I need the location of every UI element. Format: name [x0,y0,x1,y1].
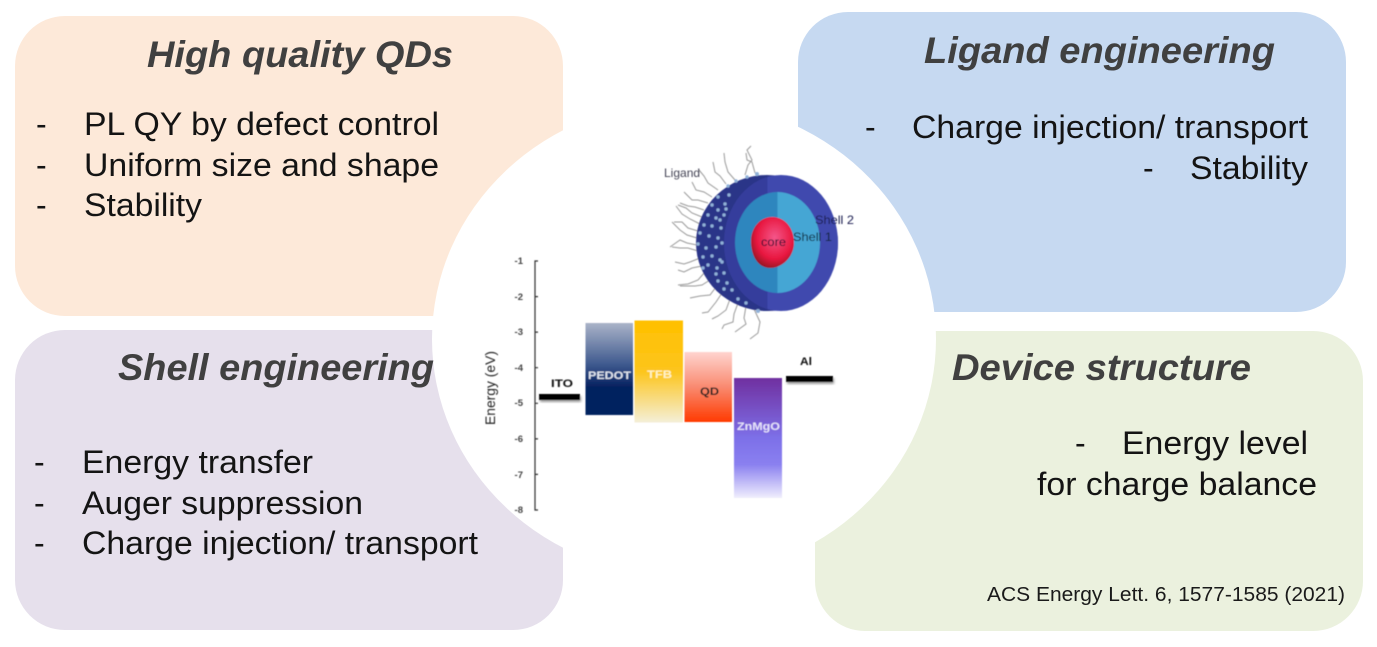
ZnMgO bar [734,378,782,498]
text block: High quality QDs list: - [36,106,47,142]
y axis tick labels: -1 [515,256,524,267]
quantum dot labels: Ligand [664,166,700,180]
y axis tick labels: -2 [515,292,523,303]
text block: Ligand engineering list: - [1143,150,1154,186]
text block: Device structure list: for charge balance [1037,466,1317,502]
panel: Device structure background [815,331,1363,631]
Al level: Al [800,356,812,368]
y axis title: Energy (eV) [482,351,498,425]
text block: Shell engineering list: - [34,525,45,561]
citation: ACS Energy Lett. 6, 1577-1585 (2021) [987,584,1345,606]
text block: Device structure list: - [1075,425,1086,461]
heading: Ligand engineering: Ligand engineering [924,30,1275,71]
central white circle [432,101,936,577]
panel: Shell engineering background [15,330,563,630]
y axis tick labels [515,256,524,516]
quantum dot labels: core [761,235,786,249]
text block: Shell engineering list: Auger suppression [82,485,363,521]
core [751,217,794,268]
text block: High quality QDs list: Stability [84,187,202,223]
ZnMgO bar: ZnMgO [737,421,780,433]
text block: Shell engineering list: - [34,444,45,480]
y axis tick labels: -4 [515,363,524,374]
TFB bar [634,320,683,422]
quantum dot diagram [664,146,854,339]
QD bar: QD [700,386,719,398]
text block: Shell engineering list: Energy transfer [82,444,313,480]
text block: Device structure list: Energy level [1122,425,1308,461]
y axis tick labels: -7 [515,470,523,481]
heading: High quality QDs: High quality QDs [147,34,453,75]
shell 2 sphere [696,175,838,311]
text block: Shell engineering list: Charge injection/ transport [82,525,478,561]
heading: Device structure: Device structure [952,347,1251,388]
panel: High quality QDs background [15,16,563,316]
text block: Shell engineering list [34,444,478,561]
text block: Ligand engineering list: Charge injection/ transport [912,109,1308,145]
text block: High quality QDs list: PL QY by defect control [84,106,439,142]
shell 1 [735,192,820,293]
ligands [670,146,760,339]
quantum dot labels: Shell 2 [815,213,854,227]
panel: Ligand engineering background [798,12,1346,312]
text block: Ligand engineering list: - [865,109,876,145]
y axis tick labels: -6 [515,434,523,445]
quantum dot labels [664,166,854,249]
y axis tick labels: -8 [515,505,523,516]
Al level [786,356,834,384]
PEDOT bar: PEDOT [588,370,631,382]
PEDOT bar [586,323,633,415]
quantum dot labels: Shell 1 [793,230,832,244]
QD bar [684,352,732,422]
text block: Ligand engineering list: Stability [1190,150,1308,186]
TFB bar: TFB [647,369,672,381]
text block: High quality QDs list: Uniform size and shape [84,147,439,183]
ITO level [539,378,581,402]
y axis tick labels: -3 [515,327,523,338]
surface dots [696,172,760,313]
text block: High quality QDs list [36,106,439,223]
text block: High quality QDs list: - [36,187,47,223]
heading: Shell engineering: Shell engineering [118,347,434,388]
text block: Ligand engineering list [865,109,1308,186]
y axis [535,261,538,510]
text block: Shell engineering list: - [34,485,45,521]
energy level chart [482,256,834,516]
text block: High quality QDs list: - [36,147,47,183]
y axis tick labels: -5 [515,398,524,409]
ITO level: ITO [551,378,574,390]
text block: Device structure list [1037,425,1317,502]
